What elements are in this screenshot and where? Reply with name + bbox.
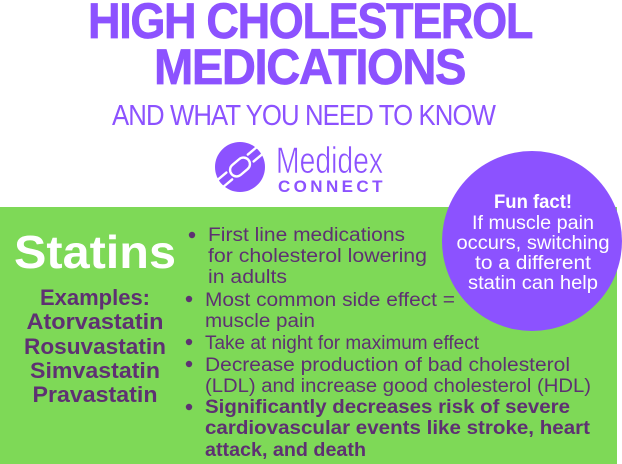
callout: fun fact: Fun fact! [494,192,572,213]
green panel [0,207,617,464]
bullet: risk: Significantly decreases risk of severe [205,397,570,418]
bullet: take at night: Take at night for maximum effect [205,333,480,354]
examples list: Pravastatin [32,382,158,407]
examples list [24,285,166,407]
bullet: first line: First line medications [208,225,405,246]
bullet: production: Decrease production of bad cholesterol [205,355,570,376]
bullet: risk [186,397,591,461]
examples list: Atorvastatin [26,309,164,334]
bullet: risk: attack, and death [205,440,366,461]
bullet: side effect: muscle pain [205,311,315,332]
icon: chain link [214,142,266,192]
examples list: Examples: [40,285,150,310]
heading: Statins: Statins [14,226,176,278]
subtitle: AND WHAT YOU NEED TO KNOW [112,100,496,132]
bullet: side effect: Most common side effect = [205,290,455,311]
callout: fun fact: to a different [475,253,592,274]
callout: fun fact: statin can help [468,273,598,294]
logo tagline: CONNECT [278,177,386,196]
logo wordmark: Medidex [276,140,383,181]
bullet: first line: for cholesterol lowering [208,246,427,267]
callout: fun fact: If muscle pain [472,213,594,234]
bullet: side effect [186,290,455,332]
bullet: production [186,355,591,397]
bullet: first line: in adults [208,267,287,288]
bullet: first line [189,225,427,288]
callout: fun fact [442,151,622,331]
title: MEDICATIONS [154,39,465,95]
title [88,0,532,95]
bullet list [186,225,591,461]
examples list: Rosuvastatin [24,334,166,359]
examples list: Simvastatin [30,358,160,383]
callout: fun fact: occurs, switching [456,233,610,254]
logo: Medidex Connect [214,140,386,196]
bullet: risk: cardiovascular events like stroke, heart [205,418,591,439]
bullet: production: (LDL) and increase good cholesterol (HDL) [205,376,591,397]
